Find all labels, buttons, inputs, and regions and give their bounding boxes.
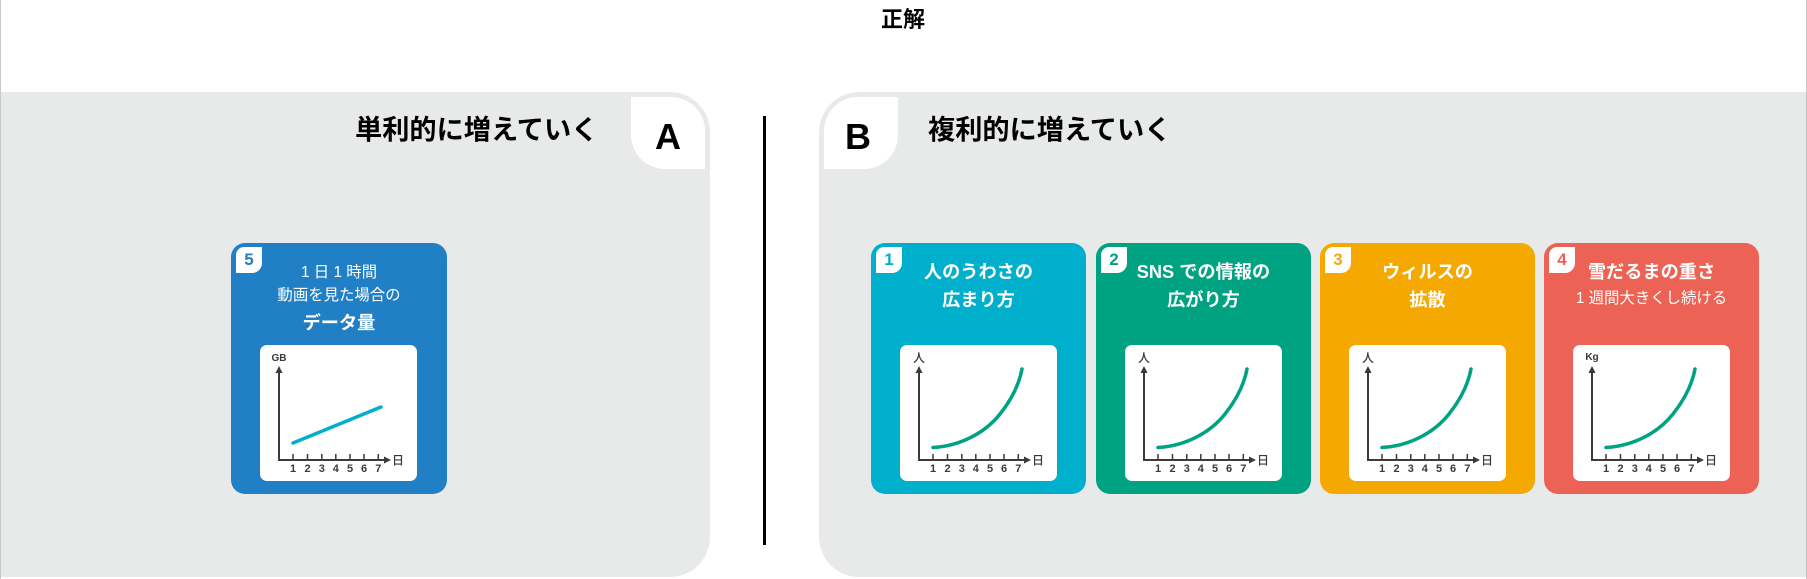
card 4 text: 1 週間大きくし続ける	[1576, 290, 1727, 307]
card 1 text	[924, 262, 1033, 310]
badge 3	[1325, 247, 1351, 273]
curve chart: snowball: 2	[1617, 463, 1624, 475]
curve chart: snowball: 4	[1646, 463, 1653, 475]
card 3 text	[1382, 262, 1473, 310]
page frame right border	[1806, 0, 1807, 579]
card 2 text: SNS での情報の	[1137, 262, 1270, 282]
curve chart: rumor: 7	[1015, 463, 1021, 475]
curve chart: rumor: 1	[930, 463, 936, 475]
curve chart: snowball: 3	[1632, 463, 1638, 475]
tab: A	[631, 97, 705, 169]
badge 4	[1549, 247, 1575, 273]
curve chart: rumor	[900, 345, 1057, 481]
curve chart: rumor: 人	[913, 351, 925, 365]
curve chart: SNS: 1	[1155, 463, 1161, 475]
heading: A: 単利的に増えていく	[355, 114, 598, 145]
curve chart: SNS: 3	[1184, 463, 1190, 475]
divider line	[763, 116, 766, 545]
curve chart: virus: 5	[1436, 463, 1442, 475]
line chart: data volume linear: 6	[361, 463, 367, 475]
line chart: data volume linear: 4	[333, 463, 340, 475]
curve chart: SNS: 人	[1138, 351, 1150, 365]
card 5 text: データ量	[303, 313, 375, 333]
line chart: data volume linear: 3	[319, 463, 325, 475]
curve chart: SNS	[1125, 345, 1282, 481]
card 5 text: 動画を見た場合の	[277, 287, 401, 304]
card 4 text: 雪だるまの重さ	[1588, 262, 1715, 282]
card 2: SNS	[1096, 243, 1311, 494]
card 4 text	[1576, 262, 1727, 307]
curve chart: rumor: 5	[987, 463, 993, 475]
curve chart: virus	[1349, 345, 1506, 481]
tab: B	[824, 97, 898, 169]
badge 5: 5	[244, 250, 254, 269]
curve chart: rumor: 6	[1001, 463, 1007, 475]
curve chart: snowball: 日	[1705, 454, 1717, 468]
title: 正解	[881, 7, 925, 32]
line chart: data volume linear	[260, 345, 417, 481]
badge 2: 2	[1109, 250, 1119, 269]
curve chart: SNS: 5	[1212, 463, 1218, 475]
card 1: rumor	[871, 243, 1086, 494]
curve chart: virus: 3	[1408, 463, 1414, 475]
badge 1	[876, 247, 902, 273]
page frame left border	[0, 0, 1, 579]
card 1 text: 広まり方	[942, 290, 1015, 310]
card 2 text: 広がり方	[1167, 290, 1240, 310]
curve chart: SNS: 日	[1257, 454, 1269, 468]
heading: B: 複利的に増えていく	[928, 114, 1171, 145]
curve chart: SNS: 7	[1240, 463, 1246, 475]
line chart: data volume linear: 5	[347, 463, 353, 475]
curve chart: snowball: 6	[1674, 463, 1680, 475]
line chart: data volume linear: 1	[290, 463, 296, 475]
curve chart: SNS: 4	[1198, 463, 1205, 475]
curve chart: snowball: Kg	[1585, 352, 1599, 363]
card 2 text	[1137, 262, 1270, 310]
card 5 text: 1 日 1 時間	[301, 264, 377, 281]
card 5 text	[277, 264, 401, 333]
curve chart: rumor: 3	[959, 463, 965, 475]
badge 5	[236, 247, 262, 273]
line chart: data volume linear: GB	[272, 353, 286, 364]
tab: B: B	[845, 116, 871, 157]
curve chart: SNS: 6	[1226, 463, 1232, 475]
curve chart: snowball: 7	[1688, 463, 1694, 475]
panel: B	[819, 92, 1806, 577]
card 3 text: ウィルスの	[1382, 262, 1473, 282]
curve chart: virus: 7	[1464, 463, 1470, 475]
curve chart: virus: 2	[1393, 463, 1400, 475]
tab: A: A	[655, 116, 681, 157]
line chart: data volume linear: 2	[304, 463, 311, 475]
curve chart: snowball	[1573, 345, 1730, 481]
curve chart: virus: 6	[1450, 463, 1456, 475]
badge 1: 1	[884, 250, 894, 269]
curve chart: virus: 日	[1481, 454, 1493, 468]
card 3 text: 拡散	[1409, 290, 1446, 310]
card 5: data volume	[231, 243, 447, 494]
line chart: data volume linear: 日	[392, 454, 404, 468]
badge 2	[1101, 247, 1127, 273]
card 4: snowball	[1544, 243, 1759, 494]
curve chart: virus: 1	[1379, 463, 1385, 475]
line chart: data volume linear: 7	[375, 463, 381, 475]
curve chart: virus: 人	[1362, 351, 1374, 365]
badge 4: 4	[1557, 250, 1567, 269]
badge 3: 3	[1333, 250, 1343, 269]
curve chart: virus: 4	[1422, 463, 1429, 475]
curve chart: snowball: 1	[1603, 463, 1609, 475]
curve chart: snowball: 5	[1660, 463, 1666, 475]
curve chart: SNS: 2	[1169, 463, 1176, 475]
curve chart: rumor: 日	[1032, 454, 1044, 468]
curve chart: rumor: 2	[944, 463, 951, 475]
curve chart: rumor: 4	[973, 463, 980, 475]
card 3: virus	[1320, 243, 1535, 494]
card 1 text: 人のうわさの	[924, 262, 1033, 282]
panel: A	[1, 92, 710, 577]
